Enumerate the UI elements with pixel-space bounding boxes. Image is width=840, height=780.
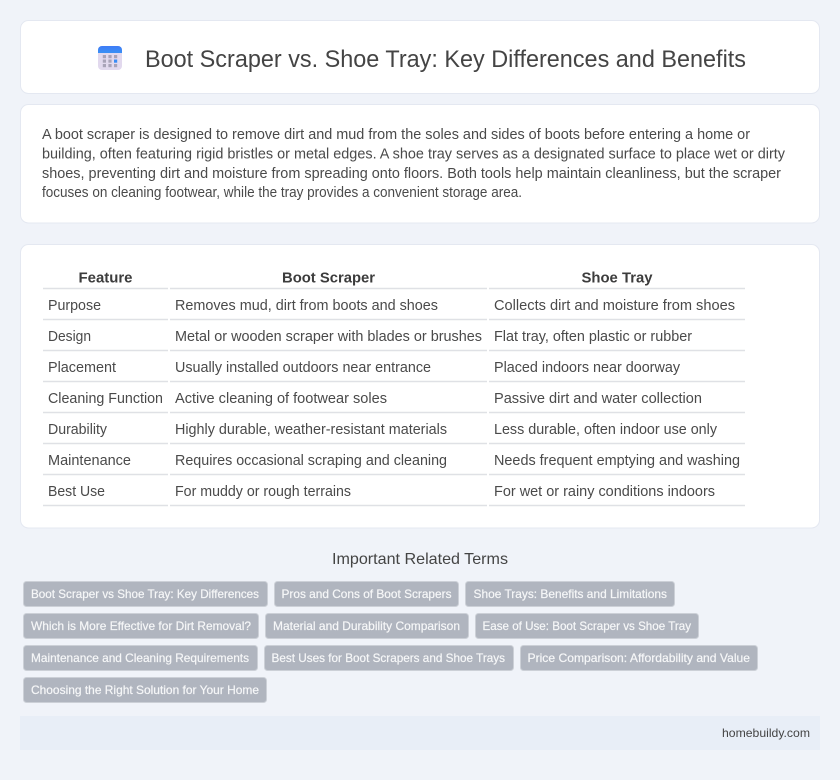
tag: Best Uses for Boot Scrapers and Shoe Trays <box>272 651 505 665</box>
tag <box>24 646 258 670</box>
tag: Material and Durability Comparison <box>273 619 460 633</box>
footer domain: homebuildy.com <box>722 726 810 740</box>
table header row <box>78 270 653 287</box>
header panel <box>20 20 820 94</box>
row: design: Flat tray, often plastic or rubber <box>494 329 692 345</box>
table header row: Boot Scraper <box>282 270 375 287</box>
tag <box>274 582 458 606</box>
row: design: Metal or wooden scraper with blades or brushes <box>175 329 482 345</box>
tag <box>24 678 266 702</box>
row: design <box>48 329 692 345</box>
row: maintenance: Requires occasional scraping and cleaning <box>175 453 447 469</box>
heading: related terms: Important Related Terms <box>332 551 508 568</box>
row: durability: Less durable, often indoor use only <box>494 422 718 438</box>
tag <box>476 614 698 638</box>
panel: introduction text <box>20 104 820 223</box>
row: placement: Placed indoors near doorway <box>494 360 681 376</box>
row: maintenance: Needs frequent emptying and washing <box>494 453 740 469</box>
intro paragraph: A boot scraper is designed to remove dirt and mud from the soles and sides of boots before entering a home or <box>42 127 750 143</box>
row: durability: Highly durable, weather-resistant materials <box>175 422 447 438</box>
footer bar <box>20 716 820 750</box>
tag <box>266 614 468 638</box>
tag: Price Comparison: Affordability and Value <box>528 651 750 665</box>
row: purpose: Purpose <box>48 298 101 314</box>
row: cleaning function <box>48 391 702 407</box>
row: best use: For muddy or rough terrains <box>175 484 351 500</box>
related term tags <box>24 582 758 702</box>
row: cleaning function: Passive dirt and water collection <box>494 391 702 407</box>
intro paragraph: focuses on cleaning footwear, while the tray provides a convenient storage area. <box>42 185 522 201</box>
tag <box>24 582 268 606</box>
title: Boot Scraper vs. Shoe Tray: Key Differences and Benefits <box>145 46 746 73</box>
row: purpose: Collects dirt and moisture from shoes <box>494 298 735 314</box>
panel: comparison table <box>20 244 820 528</box>
tag: Which is More Effective for Dirt Removal? <box>31 619 251 633</box>
row: durability <box>48 422 718 438</box>
intro paragraph: building, often featuring rigid bristles or metal edges. A shoe tray serves as a designated surface to place wet or dirty <box>42 146 786 162</box>
tag <box>24 614 258 638</box>
table header row: Shoe Tray <box>582 270 653 287</box>
row: maintenance <box>48 453 740 469</box>
row: purpose: Removes mud, dirt from boots and shoes <box>175 298 438 314</box>
row: purpose <box>48 298 735 314</box>
row: durability: Durability <box>48 422 108 438</box>
row: maintenance: Maintenance <box>48 453 131 469</box>
tag: Boot Scraper vs Shoe Tray: Key Differences <box>31 587 259 601</box>
intro paragraph <box>42 127 786 201</box>
icon: calendar <box>98 46 122 70</box>
table header row: Feature <box>78 270 132 287</box>
tag <box>466 582 674 606</box>
tag: Choosing the Right Solution for Your Home <box>31 683 259 697</box>
row: cleaning function: Cleaning Function <box>48 391 163 407</box>
row: design: Design <box>48 329 91 345</box>
tag: Pros and Cons of Boot Scrapers <box>282 587 452 601</box>
tag <box>520 646 758 670</box>
row: placement: Placement <box>48 360 116 376</box>
row: best use <box>48 484 715 500</box>
tag: Shoe Trays: Benefits and Limitations <box>474 587 667 601</box>
intro paragraph: shoes, preventing dirt and moisture from spreading onto floors. Both tools help maintain cleanliness, but the scraper <box>42 166 781 182</box>
row: placement: Usually installed outdoors near entrance <box>175 360 431 376</box>
row: placement <box>48 360 681 376</box>
tag: Ease of Use: Boot Scraper vs Shoe Tray <box>482 619 691 633</box>
row: best use: Best Use <box>48 484 105 500</box>
tag <box>264 646 514 670</box>
tag: Maintenance and Cleaning Requirements <box>31 651 249 665</box>
row: cleaning function: Active cleaning of footwear soles <box>175 391 387 407</box>
row: best use: For wet or rainy conditions indoors <box>494 484 715 500</box>
